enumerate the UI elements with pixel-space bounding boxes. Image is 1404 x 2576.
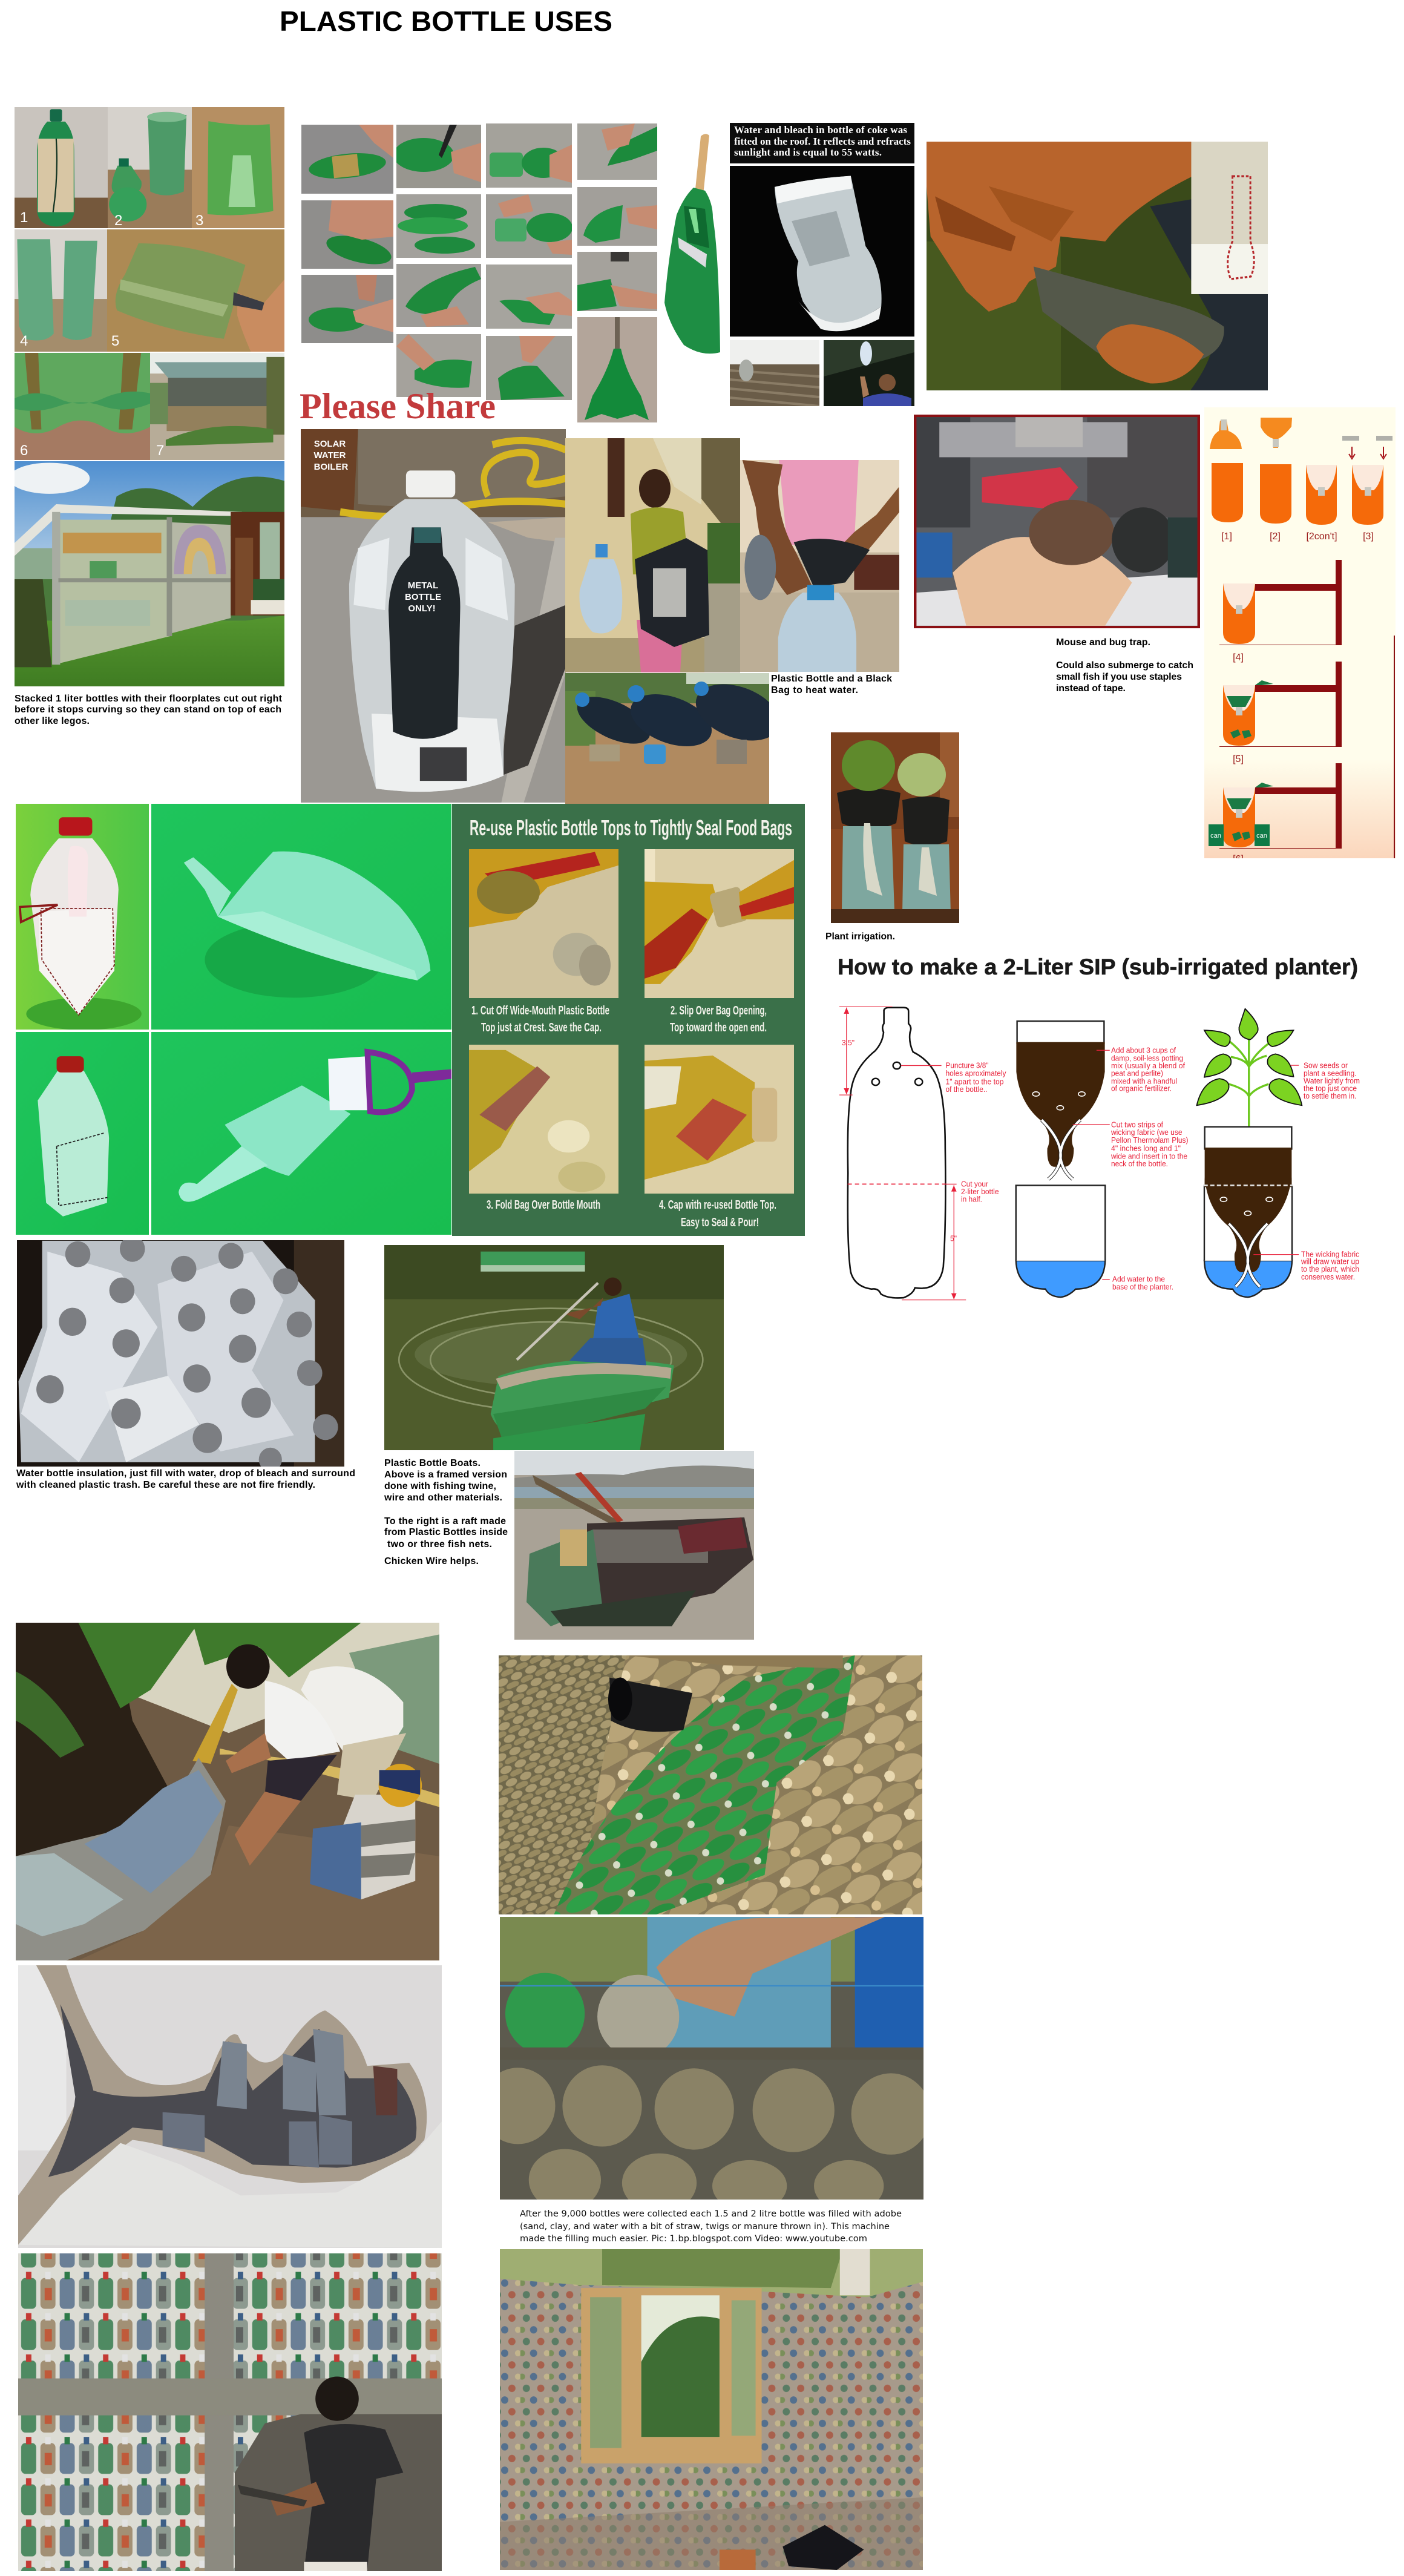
header: bleach bottle text: Water and bleach in bottle of coke was <box>734 124 907 136</box>
shelf: step 6 with cans: can <box>1210 832 1221 840</box>
header: bleach bottle text <box>730 123 914 163</box>
photo: scoop with brush <box>151 1032 451 1235</box>
photo: tile step 3 <box>192 107 284 228</box>
panel background <box>452 804 805 1236</box>
photo: tile step 4 <box>15 229 107 352</box>
photo: kids building eco-brick wall <box>16 1623 439 1960</box>
icon: step 3 bottle with rails <box>1342 436 1393 525</box>
panel: bottle roof tiles step photos <box>15 107 284 460</box>
photo: tile step 1 <box>15 107 108 228</box>
annotations: SIP instructions: peat and perlite) <box>1111 1070 1163 1078</box>
photo: mouse and bug trap <box>914 415 1200 628</box>
label: metal bottle only: METAL <box>408 580 438 591</box>
photo: broom step 12 <box>577 123 657 180</box>
annotations: SIP instructions: wicking fabric (we use <box>1110 1128 1183 1137</box>
photo: broom step 8 <box>486 123 572 188</box>
header: bleach bottle text: fitted on the roof. It reflects and refracts <box>734 136 911 147</box>
photo: bottle on corrugated roof <box>730 340 819 406</box>
caption: black bag water heating: Plastic Bottle and a Black <box>771 674 892 684</box>
photo: man under roof light <box>824 340 914 406</box>
caption: plastic bottle boats: wire and other materials. <box>384 1493 502 1503</box>
label: solar water boiler <box>313 439 348 472</box>
labels: tile step numbers: 5 <box>111 333 119 349</box>
labels: tile step numbers: 4 <box>20 333 28 349</box>
photo: jug with cut line <box>16 804 149 1030</box>
photo: broom step 10 <box>486 264 572 329</box>
panel: broom making steps <box>301 123 657 422</box>
panel: black bag water heater <box>565 438 899 804</box>
caption: plastic bottle boats: from Plastic Bottles inside <box>384 1527 508 1537</box>
illustration: marked bottle <box>839 1007 966 1300</box>
photo: step 1 cut bottle <box>469 849 618 998</box>
step labels: [6] <box>1233 854 1244 864</box>
labels: tile step numbers: 7 <box>156 442 164 459</box>
photo: bottle spoon <box>927 142 1268 390</box>
step labels: [4] <box>1233 652 1244 663</box>
heading: how to make a SIP: How to make a 2-Liter SIP (sub-irrigated planter) <box>838 954 1358 979</box>
caption: adobe filling: made the filling much easier. Pic: 1.bp.blogspot.com Video: www.youtube.com <box>520 2234 867 2244</box>
caption: water bottle insulation: with cleaned plastic trash. Be careful these are not fire friendly. <box>16 1480 315 1490</box>
annotations: SIP instructions: Add water to the <box>1112 1275 1165 1283</box>
labels: tile step numbers: 3 <box>195 212 203 229</box>
photo: fish net raft <box>514 1451 754 1640</box>
photo: broom step 15 <box>577 317 657 422</box>
step labels <box>1221 531 1374 864</box>
annotations: SIP instructions: Water lightly from <box>1304 1077 1360 1085</box>
caption: stacked bottles <box>15 694 283 726</box>
annotations: SIP instructions: 2-liter bottle <box>961 1188 999 1196</box>
photo: broom step 6 <box>396 264 481 327</box>
photo: tile step 2 <box>108 107 192 228</box>
captions: seal food bags steps: 3. Fold Bag Over Bottle Mouth <box>487 1198 600 1212</box>
photo: broom step 1 <box>301 125 393 194</box>
annotations: SIP instructions: Sow seeds or <box>1304 1062 1348 1070</box>
photo: water bottle insulation <box>17 1236 344 1471</box>
panel: orange bottle feeder diagram <box>1204 407 1396 864</box>
caption: adobe filling: After the 9,000 bottles were collected each 1.5 and 2 litre bottle was filled with adobe <box>520 2209 902 2219</box>
photo: step 2 slip over bag <box>645 849 794 998</box>
icon: finished green broom <box>664 134 720 353</box>
annotations: SIP instructions: wide and insert in to the <box>1110 1152 1187 1160</box>
annotations: SIP instructions: plant a seedling. <box>1304 1069 1357 1077</box>
annotations: SIP instructions: 5" <box>950 1235 957 1243</box>
photo: fish-shaped window in plaster wall <box>18 1965 442 2248</box>
photo: bottle bottoms set in mortar <box>481 1917 931 2212</box>
label: solar water boiler: BOILER <box>314 462 348 472</box>
annotations: SIP instructions: holes aproximately <box>945 1069 1006 1077</box>
annotations: SIP instructions: will draw water up <box>1301 1258 1359 1266</box>
shelf: step 4 <box>1219 560 1342 645</box>
annotations: SIP instructions: of organic fertilizer. <box>1111 1085 1172 1093</box>
shelf: step 6 with cans: can <box>1256 832 1267 840</box>
photo: broom step 11 <box>486 336 572 400</box>
photo: step 4 cap bottle <box>645 1045 794 1194</box>
caption: stacked bottles: before it stops curving so they can stand on top of each <box>15 705 281 715</box>
icon: step 2 continued bottle <box>1306 465 1337 525</box>
annotations: SIP instructions <box>842 1039 1360 1292</box>
caption: stacked bottles: other like legos. <box>15 716 90 726</box>
photo: girl with bottle and black bag <box>565 438 740 672</box>
photo: glowing bottle <box>730 166 914 337</box>
photo: tile step 6 <box>15 353 150 460</box>
photo: broom step 7 <box>396 334 481 397</box>
photo: solar water boiler <box>301 429 566 803</box>
panel: reuse bottle tops to seal food bags <box>452 804 805 1236</box>
annotations: SIP instructions: in half. <box>961 1195 982 1203</box>
annotations: SIP instructions: neck of the bottle. <box>1111 1160 1168 1168</box>
photo: tile step 5 <box>107 229 284 352</box>
caption: mouse and bug trap: Mouse and bug trap. <box>1056 637 1150 648</box>
photo: broom step 13 <box>577 187 657 246</box>
caption: mouse and bug trap: small fish if you use staples <box>1056 672 1182 682</box>
annotations: SIP instructions: damp, soil-less potting <box>1111 1054 1183 1062</box>
photo: tile step 7 <box>150 353 284 460</box>
panel: solar water boiler <box>301 429 566 803</box>
annotations: SIP instructions: mix (usually a blend of <box>1111 1062 1186 1070</box>
step labels: [1] <box>1221 531 1232 542</box>
photo: broom step 3 <box>301 275 393 343</box>
caption: water bottle insulation <box>16 1468 355 1490</box>
caption: water bottle insulation: Water bottle insulation, just fill with water, drop of bleach and surround <box>16 1468 355 1479</box>
caption: plastic bottle boats: To the right is a raft made <box>384 1516 506 1526</box>
photo: broom step 14 <box>577 252 657 311</box>
labels: tile step numbers: 6 <box>20 442 28 459</box>
captions: seal food bags steps: 1. Cut Off Wide-Mouth Plastic Bottle <box>471 1004 609 1017</box>
captions: seal food bags steps: Top just at Crest. Save the Cap. <box>481 1021 602 1034</box>
caption: plastic bottle boats: Chicken Wire helps. <box>384 1556 479 1566</box>
panel: milk jug scoop <box>16 804 451 1235</box>
annotations: SIP instructions: to the plant, which <box>1301 1265 1359 1273</box>
annotations: SIP instructions: of the bottle.. <box>945 1085 988 1094</box>
caption: plastic bottle boats <box>384 1458 508 1566</box>
annotations: SIP instructions: Cut two strips of <box>1111 1121 1163 1129</box>
illustration: assembled planter with seedling <box>1197 1009 1302 1297</box>
photo: broom step 2 <box>301 200 393 269</box>
caption: plastic bottle boats: done with fishing twine, <box>384 1481 496 1491</box>
photo: hands tying bag onto bottle <box>740 460 899 673</box>
photo: broom step 9 <box>486 194 572 258</box>
annotations: SIP instructions: mixed with a handful <box>1111 1077 1177 1085</box>
photo: finished scoop <box>151 804 451 1030</box>
icon: step 1 bottle <box>1210 419 1243 522</box>
annotations: SIP instructions: The wicking fabric <box>1301 1250 1359 1258</box>
step labels: [5] <box>1233 754 1244 764</box>
annotations: SIP instructions: 4" inches long and 1" <box>1111 1145 1181 1153</box>
caption: stacked bottles: Stacked 1 liter bottles with their floorplates cut out right <box>15 694 283 704</box>
photo: framed plastic bottle boat <box>384 1245 724 1450</box>
annotations: SIP instructions: conserves water. <box>1301 1273 1355 1281</box>
caption: adobe filling: (sand, clay, and water with a bit of straw, twigs or manure thrown in). This machine <box>520 2222 890 2232</box>
icon: step 2 bottle <box>1260 418 1292 524</box>
label: metal bottle only: BOTTLE <box>405 592 441 602</box>
photo: black bag bottles in the sun <box>565 673 787 804</box>
caption: black bag water heating <box>771 674 892 695</box>
panel: bleach bottle roof light <box>730 123 914 406</box>
photo: bottle wall fence <box>15 461 284 686</box>
annotations: SIP instructions: Cut your <box>961 1180 988 1188</box>
step labels: [3] <box>1363 531 1374 542</box>
shelf: step 6 with cans <box>1209 763 1342 849</box>
panel background <box>1204 407 1396 858</box>
labels: tile step numbers <box>20 209 203 459</box>
captions: seal food bags steps <box>471 1004 776 1229</box>
captions: seal food bags steps: Top toward the open end. <box>670 1021 767 1034</box>
label: solar water boiler: SOLAR <box>314 439 346 449</box>
photo: bottle house with window <box>500 2249 923 2570</box>
photo: adobe and green bottle wall <box>499 1655 922 1914</box>
caption: mouse and bug trap: Could also submerge to catch <box>1056 660 1193 671</box>
caption: plastic bottle boats: Above is a framed version <box>384 1470 507 1480</box>
step labels: [2] <box>1270 531 1281 542</box>
label: solar water boiler: WATER <box>313 450 346 461</box>
annotations: SIP instructions: 3.5" <box>842 1039 855 1047</box>
annotations: SIP instructions: 1" apart to the top <box>945 1077 1004 1086</box>
annotations: SIP instructions: the top just once <box>1304 1085 1357 1093</box>
annotations: SIP instructions: to settle them in. <box>1304 1092 1357 1100</box>
step labels: [2con't] <box>1306 531 1337 542</box>
caption: plastic bottle boats: two or three fish nets. <box>387 1539 492 1549</box>
captions: seal food bags steps: 2. Slip Over Bag Opening, <box>671 1004 767 1017</box>
illustration: bottle top with soil and wick, base with water <box>1016 1021 1110 1297</box>
diagram: 2-liter SIP planter <box>839 1007 1360 1300</box>
label: metal bottle only <box>405 580 441 614</box>
label: metal bottle only: ONLY! <box>408 603 436 614</box>
photo: plant irrigation <box>831 732 959 923</box>
annotations: SIP instructions: Add about 3 cups of <box>1111 1046 1176 1055</box>
captions: seal food bags steps: 4. Cap with re-used Bottle Top. <box>659 1198 776 1212</box>
annotations: SIP instructions: base of the planter. <box>1112 1283 1173 1292</box>
caption: adobe filling <box>520 2209 902 2244</box>
shelf: step 5 with bait <box>1219 662 1342 747</box>
caption: mouse and bug trap <box>1056 637 1193 694</box>
header: bleach bottle text: sunlight and is equal to 55 watts. <box>734 146 882 158</box>
labels: tile step numbers: 2 <box>114 212 122 229</box>
photo: bottle wall with plastering builder <box>18 2253 442 2571</box>
photo: jug with handle outline <box>16 1032 149 1235</box>
photo: broom step 5 <box>396 194 481 258</box>
annotations: SIP instructions: Pellon Thermolam Plus) <box>1111 1136 1189 1145</box>
heading: re-use bottle tops: Re-use Plastic Bottle Tops to Tightly Seal Food Bags <box>470 815 792 840</box>
photo: broom step 4 <box>393 125 481 188</box>
labels: tile step numbers: 1 <box>20 209 28 226</box>
caption: plant irrigation: Plant irrigation. <box>825 932 895 942</box>
heading: please share: Please Share <box>300 386 496 426</box>
photo: step 3 fold bag <box>469 1045 618 1194</box>
caption: black bag water heating: Bag to heat water. <box>771 685 858 695</box>
captions: seal food bags steps: Easy to Seal & Pour! <box>681 1216 759 1229</box>
caption: mouse and bug trap: instead of tape. <box>1056 683 1126 694</box>
title: PLASTIC BOTTLE USES <box>280 5 612 37</box>
annotations: SIP instructions: Puncture 3/8" <box>945 1062 989 1070</box>
caption: plastic bottle boats: Plastic Bottle Boats. <box>384 1458 481 1468</box>
